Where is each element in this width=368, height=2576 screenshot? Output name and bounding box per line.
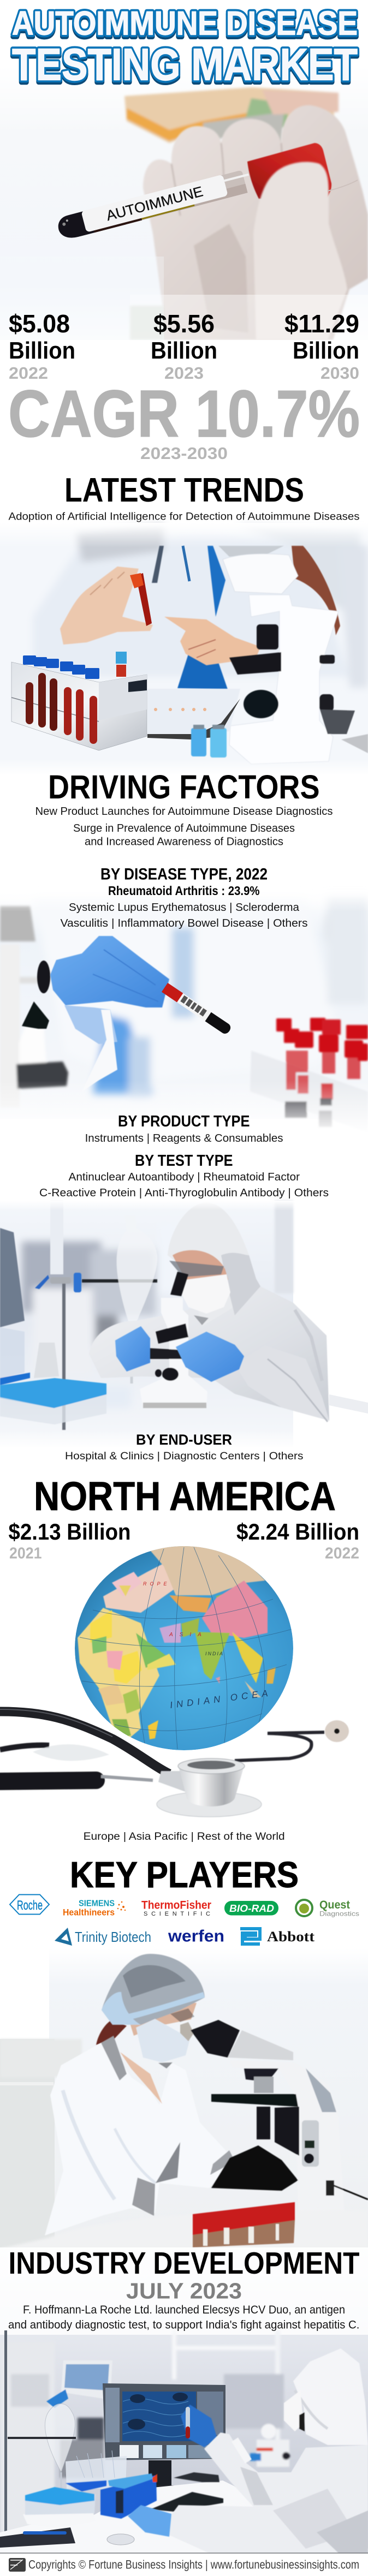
logo: Siemens Healthineers: [63, 1899, 126, 1918]
globe map labels: INDIA: [205, 1651, 224, 1656]
logo: Trinity Biotech: [55, 1928, 151, 1946]
stat: 2022 market size: $5.08: [9, 309, 70, 338]
text: disease type list: Systemic Lupus Erythematosus | Scleroderma: [69, 901, 300, 914]
icon: blood sample tube: [186, 2407, 190, 2438]
heading: driving factors: DRIVING FACTORS: [48, 768, 320, 806]
text: test type list: Antinuclear Autoantibody | Rheumatoid Factor: [69, 1171, 300, 1183]
icon: cuff: [64, 1005, 117, 1044]
icon: rack of red capped tubes: [250, 1018, 368, 1132]
stat: 2022 market size: 2022: [9, 363, 48, 383]
stat: 2030 market size: 2030: [320, 363, 359, 383]
stat: 2023 market size: Billion: [151, 337, 217, 364]
logo: Trinity Biotech: Trinity Biotech: [75, 1929, 151, 1945]
heading: by end-user: BY END-USER: [136, 1432, 232, 1448]
text: development description: [8, 2304, 359, 2331]
panel: photo of researcher at microscope: [0, 1948, 368, 2259]
icon: lab coat: [45, 2036, 235, 2235]
photo: blurred orange sample boxes: [124, 87, 339, 145]
logo: Thermo Fisher Scientific: ThermoFisher: [141, 1899, 211, 1911]
globe map labels: ASIA: [169, 1632, 208, 1638]
photo: pale table top: [0, 2210, 368, 2259]
icon: block of red-capped sample tubes: [193, 2202, 295, 2247]
icon: red blood tube: [130, 573, 152, 626]
logo: Roche: [10, 1895, 49, 1915]
logo: Thermo Fisher Scientific: SCIENTIFIC: [144, 1911, 210, 1917]
stat: north america 2021: 2021: [9, 1545, 41, 1562]
icon: barcoded sample tube: [162, 983, 233, 1035]
stat: north america 2022: $2.24 Billion: [236, 1519, 359, 1545]
text: driving factors list: [35, 805, 333, 848]
icon: petri dish: [107, 2534, 134, 2545]
heading: by disease type: BY DISEASE TYPE, 2022: [100, 866, 268, 883]
stat: CAGR: 2023-2030: [140, 444, 228, 463]
icon: keyboards: [150, 2492, 223, 2512]
photo: lab coat and scrubs: [33, 524, 368, 688]
heading: north america: NORTH AMERICA: [34, 1474, 336, 1519]
photo: white table: [0, 2480, 368, 2553]
photo: blurred lab background: [33, 895, 368, 1097]
stat: north america 2021: $2.13 Billion: [9, 1519, 131, 1545]
icon: glove on upper hand: [181, 2405, 217, 2447]
icon: chest piece: [157, 1758, 262, 1817]
icon: Fortune Business Insights logo: [9, 2558, 26, 2572]
logo: Siemens Healthineers: Healthineers: [63, 1907, 115, 1918]
panel: photo of laboratory workstation: [0, 2247, 368, 2553]
panel: photo of scientist in protective suit: [0, 1201, 368, 1449]
text: date: JULY 2023: [126, 2278, 242, 2303]
logo: Quest Diagnostics: Diagnostics: [319, 1910, 359, 1918]
panel: photo of blue glove holding sample: [0, 890, 368, 1201]
photo: fade into white: [0, 890, 368, 911]
photo: blurred lab background: [0, 1223, 180, 1408]
icon: glass stand and funnel: [35, 1201, 157, 1430]
icon: pale tube rack: [66, 2450, 127, 2489]
icon: separating funnel: [4, 2330, 76, 2532]
heading: by test type: BY TEST TYPE: [135, 1152, 233, 1170]
icon: red tube cap: [247, 143, 331, 202]
text: product type list: Instruments | Reagents & Consumables: [85, 1132, 283, 1144]
photo: microscope on the left: [0, 906, 68, 1108]
logo: Quest Diagnostics: Quest: [319, 1899, 350, 1911]
photo: table and right wall fade: [329, 1394, 368, 1414]
globe map labels: INDIAN OCEA: [169, 1687, 272, 1710]
icon: blood collection tube: [56, 168, 253, 241]
stat: north america 2022: 2022: [325, 1545, 359, 1562]
illustration: globe on stethoscope: [0, 1542, 349, 1817]
logo: Roche: Roche: [17, 1898, 43, 1913]
icon: white microscope: [223, 554, 368, 764]
text: other regions list: Europe | Asia Pacific | Rest of the World: [84, 1830, 285, 1842]
stat: 2022 market size: Billion: [9, 337, 75, 364]
icon: blue capped tube tray: [23, 2487, 96, 2528]
title: [12, 4, 358, 90]
text: driving factors list: Surge in Prevalence of Autoimmune Diseases: [73, 822, 295, 834]
logo: Abbott: [240, 1929, 314, 1945]
icon: gloved hand: [143, 105, 368, 340]
stat: 2023 market size: $5.56: [153, 309, 215, 338]
photo: fade edges: [0, 523, 368, 547]
icon: microscope: [180, 2020, 368, 2221]
icon: dark mat with marker: [0, 2527, 75, 2548]
icon: blue gloves: [115, 1326, 244, 1382]
stat: leading disease share: Rheumatoid Arthritis : 23.9%: [108, 884, 260, 898]
logo: Thermo Fisher Scientific: [141, 1899, 211, 1917]
panel: photo of doctor with blood tube and microscope: [0, 523, 368, 775]
logo: Werfen: werfen: [168, 1927, 224, 1945]
text: end-user list: Hospital & Clinics | Diagnostic Centers | Others: [65, 1451, 304, 1462]
icon: surgical mask: [136, 2019, 190, 2062]
icon: hairnet and face: [102, 1954, 205, 2036]
globe map labels: ROPE: [143, 1581, 170, 1587]
icon: blue glove: [50, 936, 169, 1007]
stat: 2030 market size: [284, 309, 359, 383]
stat: 2030 market size: $11.29: [284, 309, 359, 338]
icon: background technician monitor: [46, 2360, 112, 2408]
text: driving factors list: New Product Launches for Autoimmune Disease Diagnostics: [35, 805, 333, 818]
photo: blurred shelves: [0, 2330, 284, 2532]
text: latest trends detail: Adoption of Artificial Intelligence for Detection of Autoimmune Diseases: [9, 511, 360, 523]
stat: 2030 market size: Billion: [293, 337, 359, 364]
stat: 2023 market size: 2023: [164, 363, 204, 383]
icon: pointing hand: [164, 617, 260, 665]
icon: rack of blood tubes: [11, 652, 147, 750]
stat: north america 2022: [236, 1519, 359, 1562]
icon: background microscope: [250, 2424, 290, 2467]
logo: Bio-Rad: [224, 1901, 278, 1916]
text: test type list: [39, 1171, 329, 1199]
stat: 2022 market size: [9, 309, 75, 383]
text: development description: F. Hoffmann-La Roche Ltd. launched Elecsys HCV Duo, an antigen: [23, 2304, 345, 2316]
heading: by product type: BY PRODUCT TYPE: [118, 1113, 250, 1130]
globe map labels: [143, 1581, 272, 1710]
icon: white protective suit: [89, 1202, 329, 1422]
stat: 2023 market size: [151, 309, 217, 383]
panel: hero photo with blood tube and gloved hand: [0, 65, 368, 351]
icon: face, goggles and mask: [169, 1250, 230, 1314]
icon: hand holding tube: [60, 567, 153, 645]
stat: north america 2021: [9, 1519, 131, 1562]
logo: Abbott: Abbott: [267, 1929, 314, 1945]
icon: globe: [75, 1542, 293, 1750]
icon: ponytail: [96, 2019, 127, 2045]
text: driving factors list: and Increased Awareness of Diagnostics: [85, 835, 283, 848]
icon: main monitor: [103, 2383, 225, 2493]
icon: protective suit: [169, 2348, 368, 2553]
icon: monitor at the left: [0, 1228, 25, 1327]
photo: table top and clipboard: [147, 689, 240, 737]
photo: soft lower fade: [130, 295, 368, 340]
icon: blue vials: [191, 725, 227, 758]
heading: by disease type: [100, 866, 268, 898]
logo: Quest Diagnostics: [296, 1899, 359, 1918]
text: disease type list: Vasculitis | Inflammatory Bowel Disease | Others: [60, 917, 308, 929]
text: disease type list: [60, 901, 308, 929]
logo: Siemens Healthineers: SIEMENS: [79, 1899, 115, 1908]
graticule: [80, 1547, 292, 1749]
icon: glove on lower hand: [128, 2505, 171, 2537]
icon: blue tube tray: [0, 1327, 106, 1424]
tube label text: AUTOIMMUNE: [104, 183, 205, 224]
icon: microscope: [140, 1272, 207, 1408]
text: development description: and antibody diagnostic test, to support India's fight against hepatitis C.: [8, 2318, 359, 2331]
text: test type list: C-Reactive Protein | Anti-Thyroglobulin Antibody | Others: [39, 1186, 329, 1199]
icon: ear piece: [325, 1720, 349, 1742]
logo: Bio-Rad: BIO-RAD: [229, 1903, 274, 1914]
icon: thumb over the tube cap: [253, 162, 347, 340]
heading: key players: KEY PLAYERS: [70, 1855, 299, 1895]
icon: stethoscope: [0, 1709, 349, 1817]
icon: blue rack with vials: [66, 2473, 157, 2519]
footer: [0, 2553, 368, 2576]
heading: latest trends: LATEST TRENDS: [64, 472, 304, 509]
